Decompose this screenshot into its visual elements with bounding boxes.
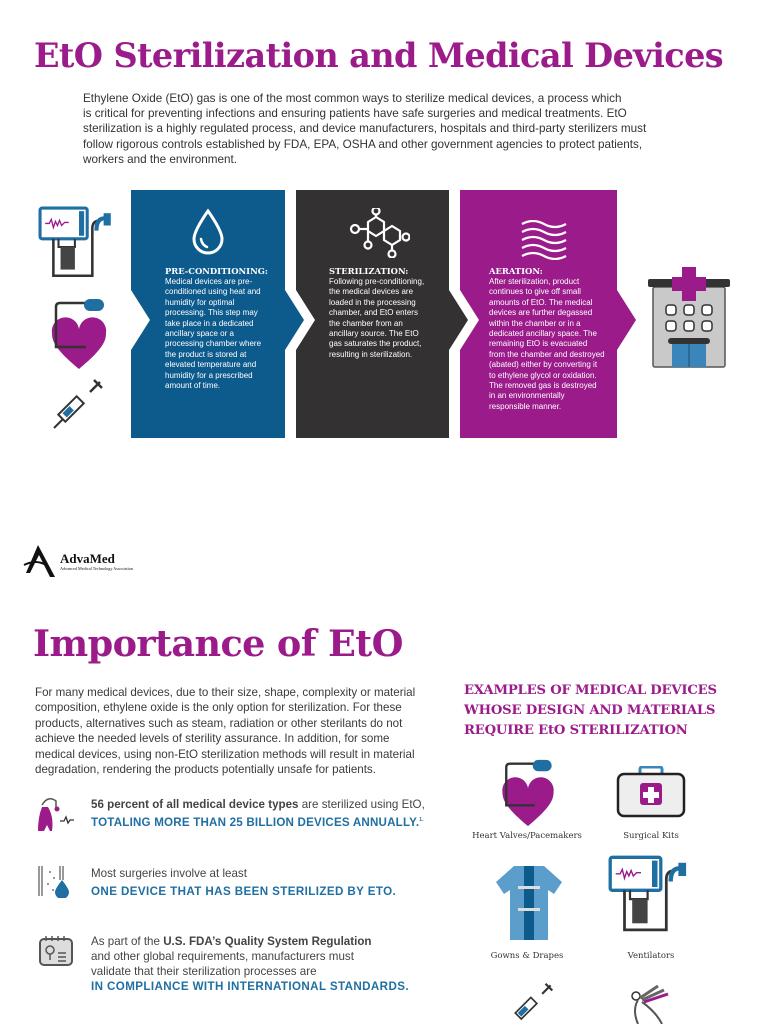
device: ventilators: Ventilators: [628, 951, 674, 961]
heading: examples: WHOSE DESIGN AND MATERIALS: [464, 703, 715, 718]
text: aeration: After sterilization, product continues to give off small amounts of EtO. The medical devices are further degassed within the chamber or in a dedicated ancillary space. The remaining EtO is evacuated from the chamber and destroyed (abated) either by converting it to ethylene glycol or oxidation. The removed gas is destroyed in an environmentally responsible manner.: [489, 277, 605, 411]
device: heart valves: [472, 760, 582, 841]
intro paragraph: sterilization is a highly regulated process, and device manufacturers, hospitals and third-party sterilizers must: [83, 122, 646, 135]
intro paragraph: Ethylene Oxide (EtO) gas is one of the most common ways to sterilize medical devices, a process which: [83, 92, 622, 105]
intro paragraph: workers and the environment.: [83, 153, 237, 166]
text: sterilization: Following pre-conditioning, the medical devices are loaded in the processing chamber, and EtO enters the chamber from an ancillary source. The EtO gas saturates the product, resulting in sterilization.: [329, 277, 424, 359]
icon: ventilator (left): [38, 206, 111, 277]
device: catheter: [631, 984, 668, 1024]
device: ventilators: [608, 856, 686, 961]
logo: AdvaMed: Advanced Medical Technology Association: [60, 566, 133, 571]
icon: probe: [38, 798, 74, 831]
device: surgical kits: Surgical Kits: [623, 831, 679, 841]
icon: regulation: [39, 936, 73, 966]
stat: FDA compliance: [39, 935, 409, 993]
intro paragraph: is critical for preventing infections and ensuring patients have safe surgeries and medical treatments. EtO: [83, 107, 627, 120]
stat: 56 percent: 56 percent of all medical device types are sterilized using EtO,: [91, 798, 425, 811]
paragraph: importance: For many medical devices, due to their size, shape, complexity or material composition, ethylene oxide is the only option for sterilization. For these products, alternatives such as steam, radiation or other sterilants do not achieve the needed levels of sterility assurance. In addition, for some medical devices, using non-EtO sterilization methods will result in material degradation, rendering the products potentially unsafe for patients.: [35, 686, 415, 776]
device: syringe: [514, 983, 553, 1020]
stat: surgeries: Most surgeries involve at least: [91, 867, 247, 880]
heading: examples: EXAMPLES OF MEDICAL DEVICES: [464, 683, 717, 698]
icon: heart pacemaker (left): [52, 299, 106, 369]
device: surgical kits: [616, 766, 686, 841]
device: gowns: [491, 866, 563, 961]
heading: examples: [464, 683, 717, 738]
text: aeration: AERATION:: [489, 266, 543, 276]
icon: hospital: [648, 267, 730, 368]
icon: sterile drop: [38, 866, 69, 898]
heading: examples: REQUIRE EtO STERILIZATION: [464, 723, 688, 738]
intro paragraph: follow rigorous controls established by FDA, EPA, OSHA and other government agencies to protect patients,: [83, 138, 642, 151]
heading: Importance of EtO: Importance of EtO: [33, 622, 403, 665]
icon: molecule: [350, 208, 410, 258]
logo: AdvaMed: AdvaMed: [60, 551, 115, 566]
intro paragraph: [83, 92, 646, 166]
text: sterilization: STERILIZATION:: [329, 266, 408, 276]
text: pre-conditioning: PRE-CONDITIONING:: [165, 266, 268, 276]
text: pre-conditioning: Medical devices are pre-conditioned using heat and humidity for optimal processing. This step may take place in a dedicated ancillary space or a processing chamber where the product is stored at elevated temperature and humidity for a prescribed amount of time.: [165, 277, 261, 390]
icon: waves: [522, 220, 566, 260]
stat: 56 percent: [38, 798, 425, 831]
stat: 56 percent: TOTALING MORE THAN 25 BILLION DEVICES ANNUALLY.1.: [91, 816, 424, 829]
device: heart valves: Heart Valves/Pacemakers: [472, 831, 582, 841]
icon: water drop: [192, 208, 224, 254]
logo: AdvaMed: [24, 545, 133, 577]
icon: syringe (left): [53, 379, 103, 429]
stat: FDA compliance: As part of the U.S. FDA’s Quality System Regulation and other global requirements, manufacturers must validate that their sterilization processes are: [91, 935, 372, 978]
stat: FDA compliance: IN COMPLIANCE WITH INTERNATIONAL STANDARDS.: [91, 980, 409, 993]
stat: surgeries: ONE DEVICE THAT HAS BEEN STERILIZED BY ETO.: [91, 885, 396, 898]
device: gowns: Gowns & Drapes: [491, 951, 563, 961]
process chevrons: [131, 190, 636, 438]
title: EtO Sterilization and Medical Devices: [34, 36, 723, 75]
stat: surgeries: [38, 866, 396, 898]
